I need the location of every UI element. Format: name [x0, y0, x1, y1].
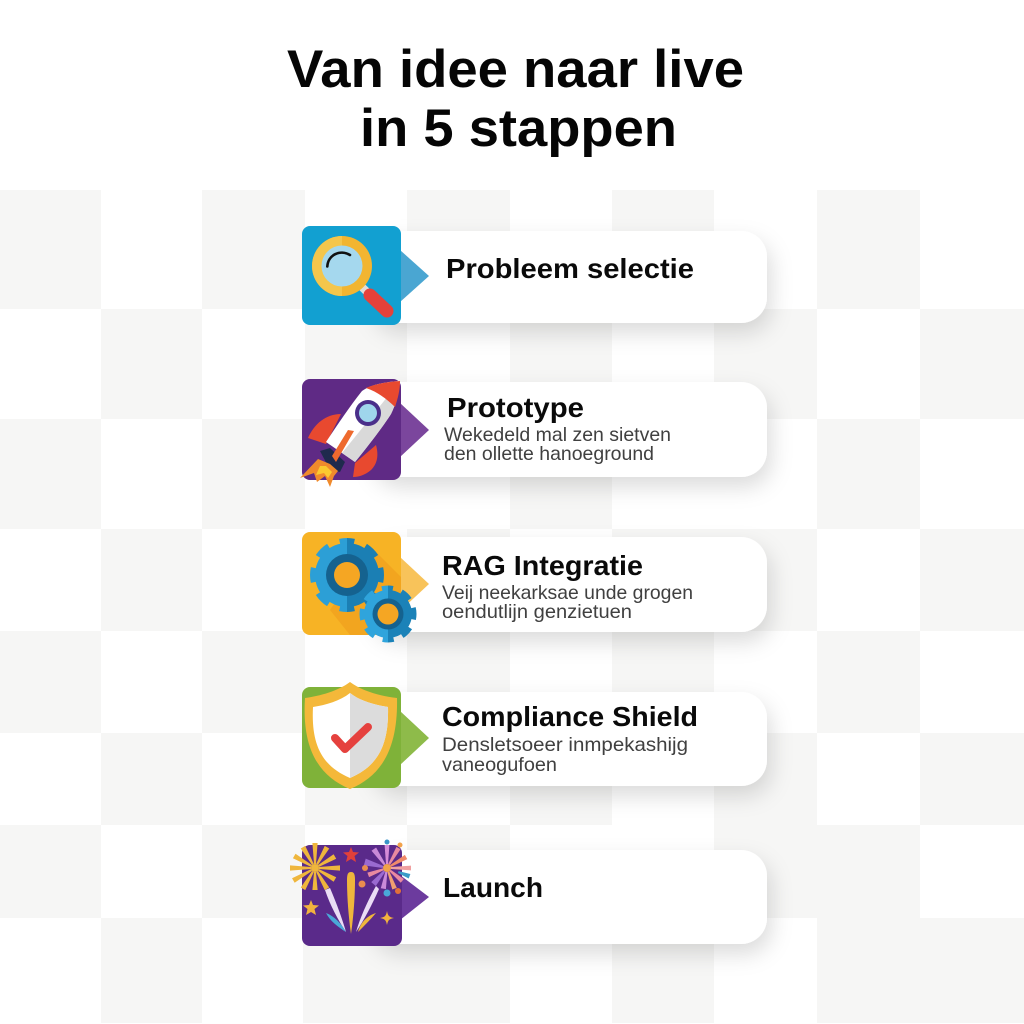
step 2 description: den ollette hanoeground [444, 443, 654, 465]
pointer 3 [400, 557, 429, 611]
step 3 description: oendutlijn genzietuen [442, 601, 632, 623]
step 4 description [442, 734, 688, 776]
panel: step 4 compliance shield [302, 682, 767, 789]
panel: step 1 probleem selectie [302, 226, 767, 325]
icon: shield [302, 682, 401, 789]
title [287, 40, 744, 158]
step 3 heading: RAG Integratie [442, 550, 643, 581]
step 4 description: vaneogufoen [442, 754, 557, 776]
step 1 heading: Probleem selectie [446, 253, 694, 284]
pointer 4 [400, 711, 429, 765]
title: Van idee naar live [287, 40, 744, 99]
card 4 background [370, 692, 767, 786]
icon: magnifying glass [302, 226, 401, 325]
step 2 description [444, 424, 671, 465]
title: in 5 stappen [360, 99, 677, 158]
step 4 heading: Compliance Shield [442, 701, 698, 732]
card 1 background [370, 231, 767, 323]
card 5 background [370, 850, 767, 944]
step 4 description: Densletsoeer inmpekashijg [442, 734, 688, 756]
icon: rocket [300, 379, 401, 487]
icon: fireworks [290, 840, 411, 946]
pointer 2 [400, 403, 429, 457]
step 2 description: Wekedeld mal zen sietven [444, 424, 671, 446]
panel: step 5 launch [290, 840, 767, 946]
pointer 1 [400, 250, 429, 302]
card 3 background [370, 537, 767, 632]
pointer 5 [400, 875, 429, 920]
card 2 background [370, 382, 767, 477]
step 3 description: Veij neekarksae unde grogen [442, 582, 693, 604]
step 2 heading: Prototype [447, 392, 584, 423]
panel: step 3 rag integratie [302, 532, 767, 639]
icon: gears [302, 532, 413, 639]
step 5 heading: Launch [443, 872, 543, 903]
step 3 description [442, 582, 693, 623]
panel: step 2 prototype [300, 379, 767, 487]
